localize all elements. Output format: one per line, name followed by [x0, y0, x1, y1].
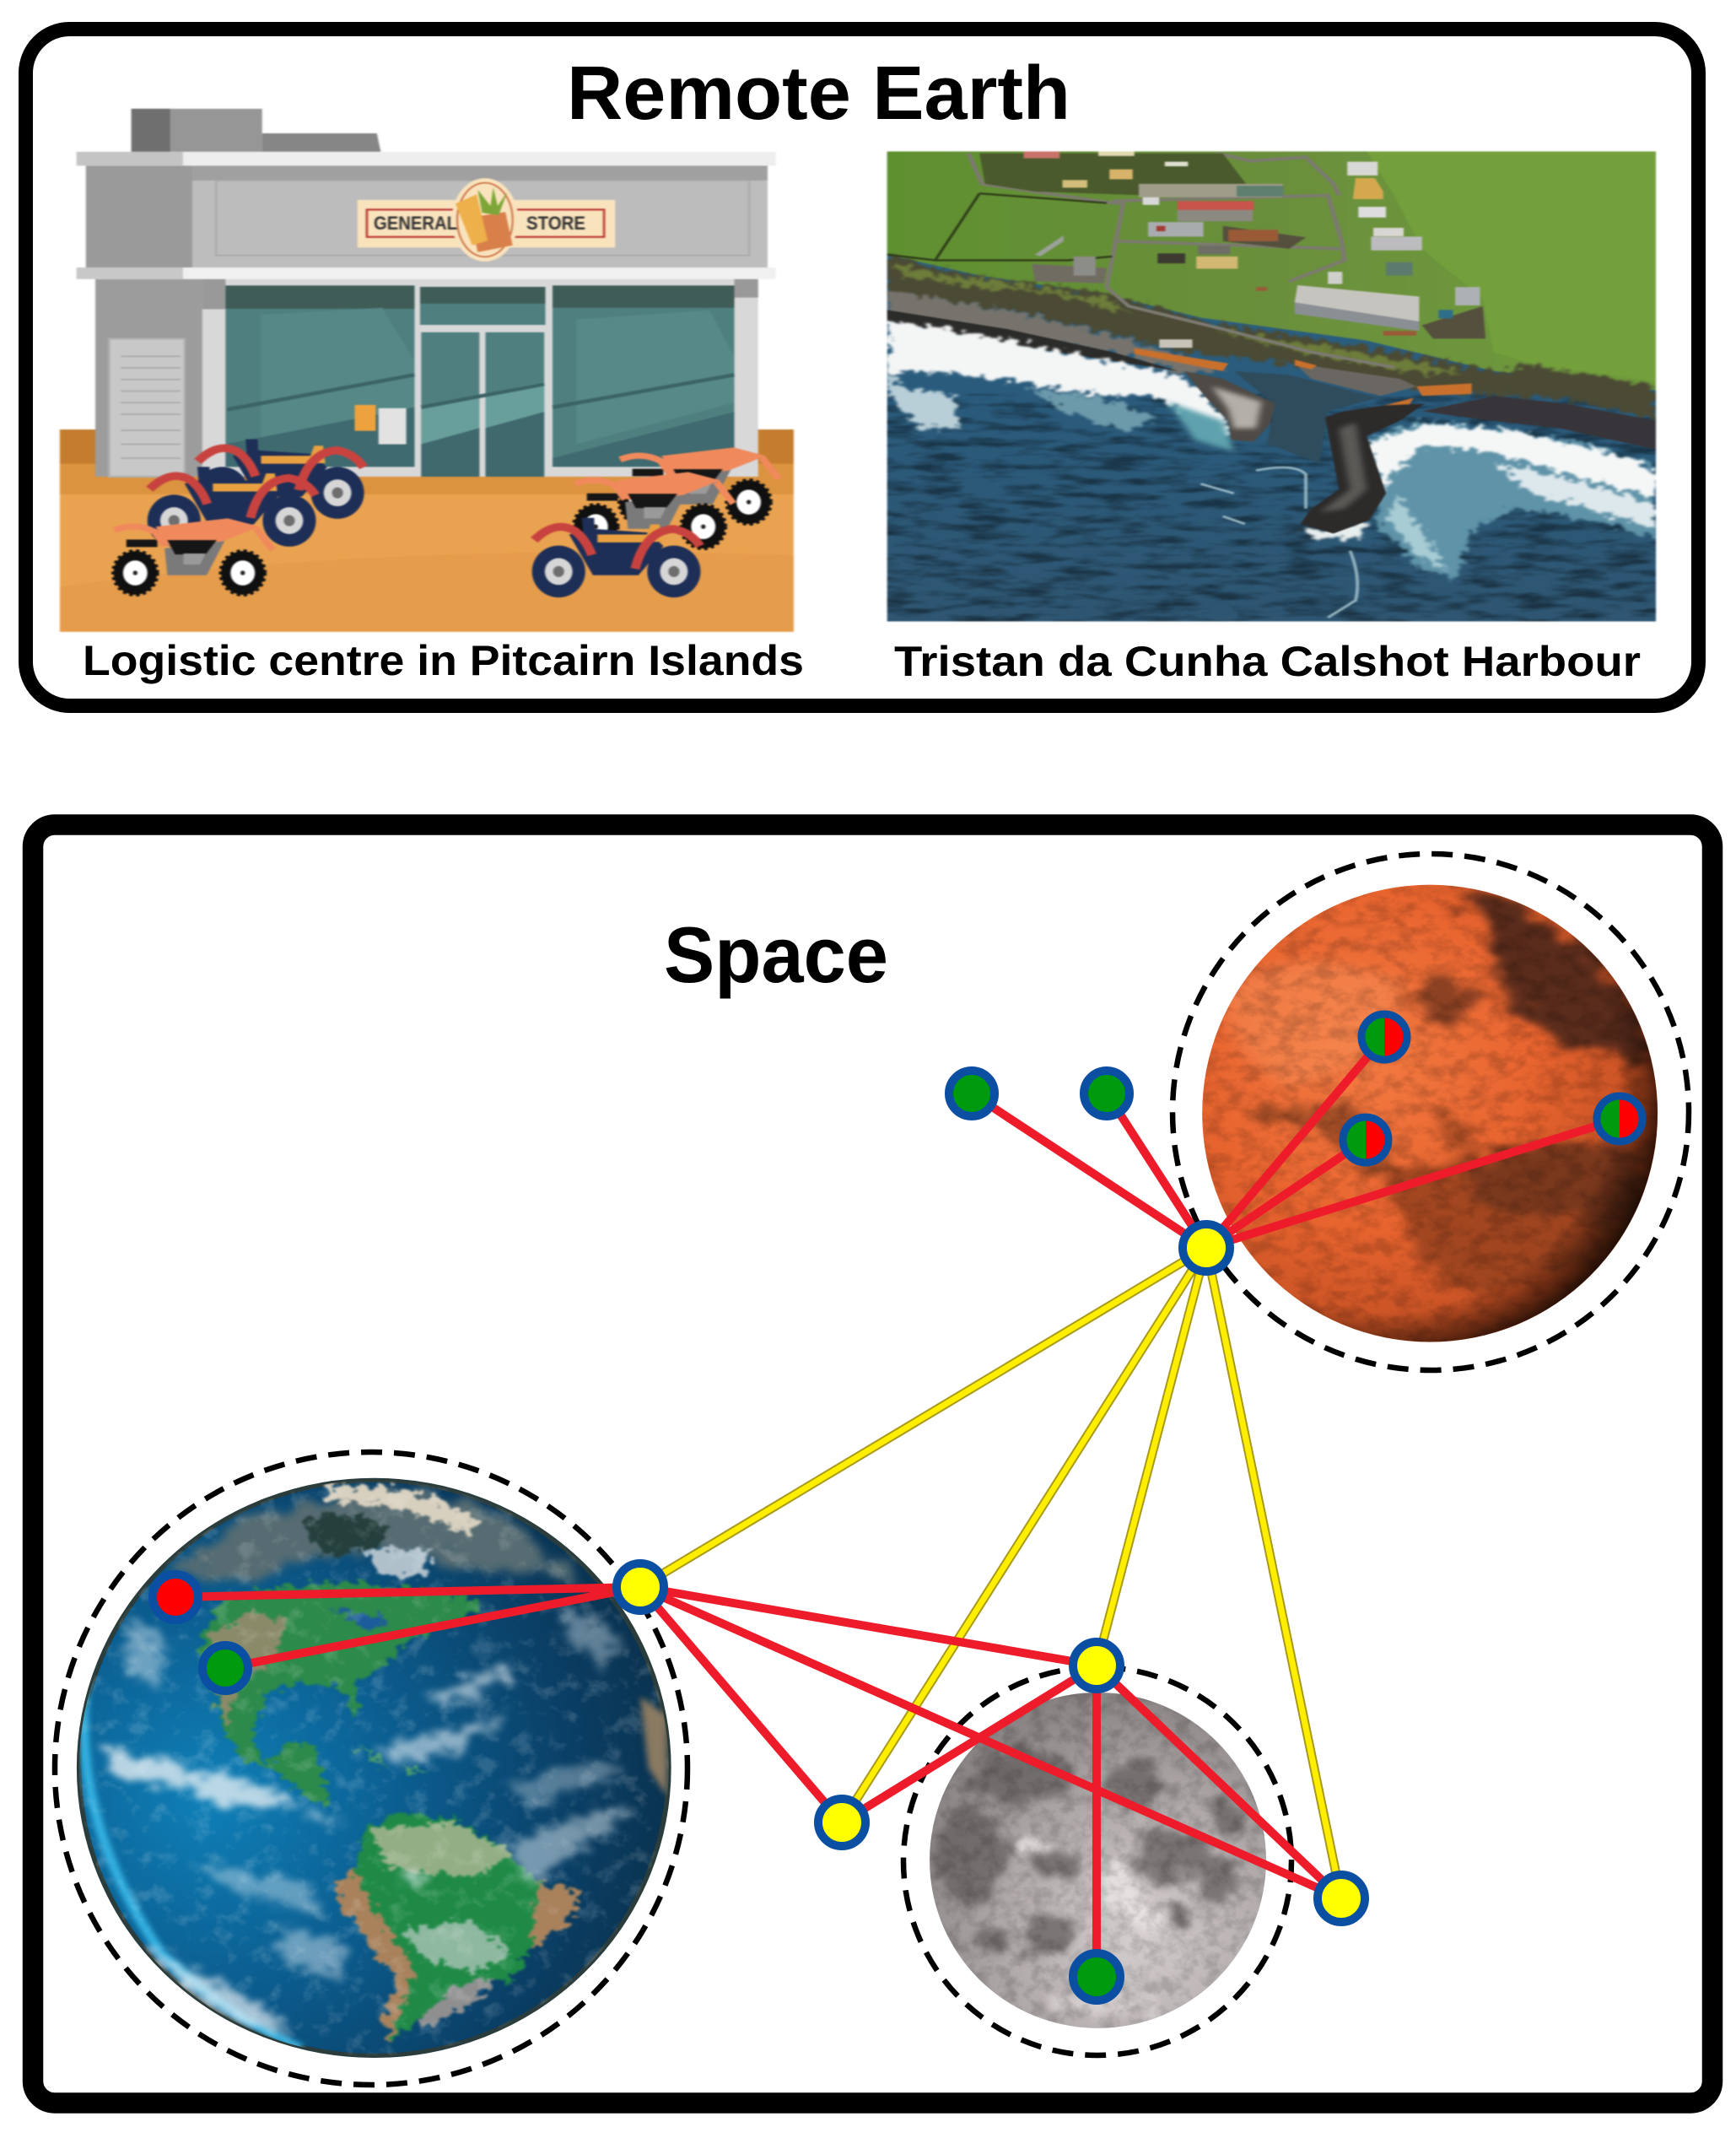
Moon boundary [903, 1667, 1291, 2055]
node: lower left relay [818, 1799, 865, 1846]
photo: Tristan da Cunha Calshot Harbour [887, 151, 1656, 622]
shop sign: General Store: GENERAL [374, 213, 457, 234]
South America [333, 1813, 580, 2042]
eastern limb land [640, 1697, 667, 1796]
rocky foreshore [887, 291, 1223, 371]
caption: Tristan da Cunha Calshot Harbour: Tristan da Cunha Calshot Harbour [894, 638, 1641, 685]
node: Moon orbit right relay [1318, 1875, 1365, 1922]
Moon globe [930, 1693, 1266, 2028]
roller shutter [109, 339, 185, 477]
planet: Earth [55, 1452, 687, 2085]
panel frame: Remote Earth [25, 29, 1699, 705]
shop windows and doors [225, 285, 735, 477]
shop sign: General Store: STORE [526, 213, 585, 234]
building facade [77, 152, 776, 477]
cloud texture [79, 1480, 669, 2056]
panel: Space [33, 825, 1712, 2103]
quad bikes: left group [114, 440, 364, 595]
breakwater left [1184, 371, 1275, 442]
illustration: general store with quad bikes [60, 109, 794, 632]
panel: Remote Earth [25, 29, 1699, 705]
sea [887, 151, 1656, 622]
roads [968, 154, 1394, 367]
node: Earth red station [153, 1574, 198, 1620]
planet: Moon [903, 1667, 1291, 2055]
caption: Logistic centre in Pitcairn Islands: Logistic centre in Pitcairn Islands [83, 637, 804, 684]
Earth globe [79, 1480, 669, 2056]
orange machinery [1133, 348, 1473, 407]
north polar clouds [177, 1491, 581, 1583]
surf turquoise [1167, 402, 1234, 451]
quad bikes: right group [532, 447, 779, 597]
surf right [1286, 421, 1656, 581]
heading: Remote Earth: Remote Earth [567, 51, 1070, 136]
Earth boundary [55, 1452, 687, 2085]
node: Moon green base [1073, 1953, 1120, 2000]
node: green satellite two [1084, 1071, 1129, 1116]
shop sign: General Store [358, 178, 615, 262]
node: Moon orbit top relay [1073, 1642, 1120, 1689]
breaking surf left [887, 320, 1231, 436]
roof units [132, 109, 380, 152]
node: Mars orbit relay [1183, 1224, 1230, 1271]
quay [1295, 364, 1416, 396]
ground [60, 429, 794, 632]
panel frame: Space [33, 825, 1712, 2103]
Mars globe [1202, 884, 1658, 1342]
node: Mars split station three [1597, 1096, 1642, 1142]
node: Earth orbit relay [617, 1563, 664, 1611]
upper right field [1368, 152, 1535, 363]
sea surface texture [887, 394, 1656, 622]
coastal cliffs [887, 255, 1656, 421]
planet: Mars [1173, 854, 1689, 1370]
links: red local connections [175, 1037, 1620, 1977]
bright limb [84, 1677, 301, 2049]
cloud bands [102, 1606, 635, 2032]
links: yellow inter-body connections [640, 1248, 1341, 1898]
Mars boundary [1173, 854, 1689, 1370]
North America [202, 1583, 484, 1806]
node: Mars split station one [1361, 1014, 1407, 1060]
village buildings [1024, 151, 1480, 336]
node: green satellite one [949, 1071, 995, 1116]
node: Earth green station [202, 1645, 248, 1691]
village ground [979, 154, 1250, 196]
field walls [887, 193, 1113, 261]
swirl foam [1200, 467, 1357, 618]
inner harbour water [1234, 371, 1377, 463]
breakwater right [1300, 403, 1425, 533]
heading: Space: Space [664, 910, 888, 999]
green land [887, 151, 1656, 391]
black sand beach [1422, 396, 1656, 450]
node: Mars split station two [1343, 1117, 1388, 1163]
